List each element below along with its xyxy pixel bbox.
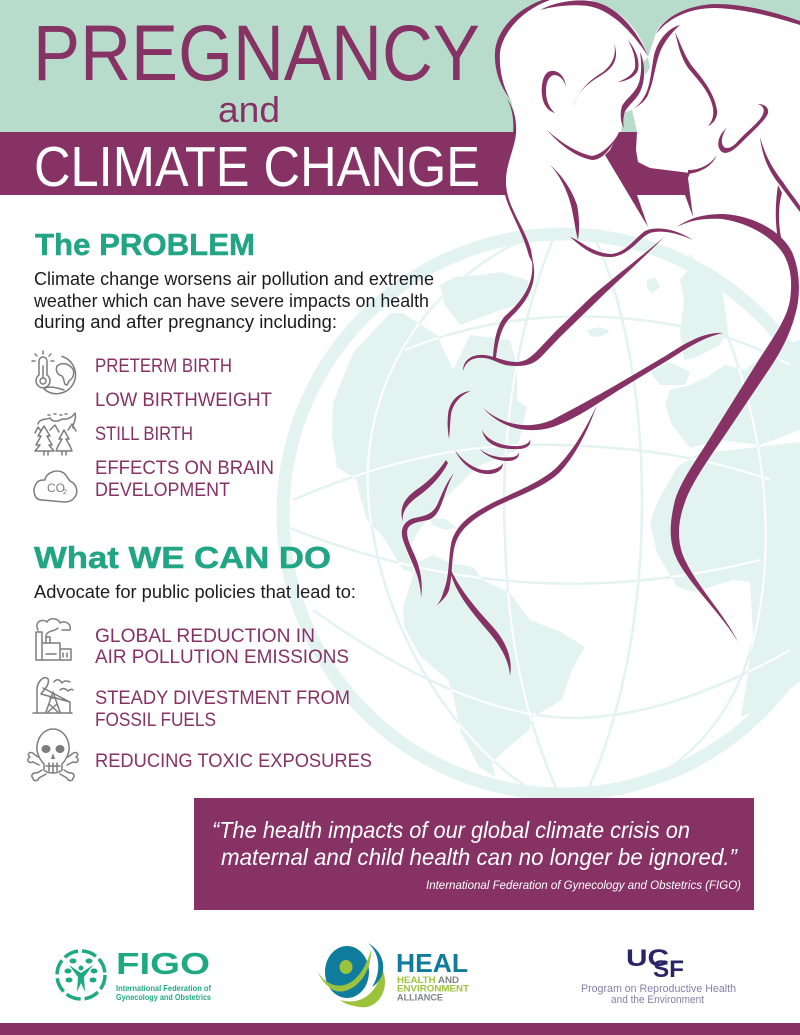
globe outline ring xyxy=(283,234,800,794)
FIGO full name xyxy=(116,983,211,1002)
action list item: STEADY DIVESTMENT FROM xyxy=(95,687,350,709)
quote box xyxy=(194,798,754,910)
mint header background xyxy=(0,0,800,132)
problem description: weather which can have severe impacts on health xyxy=(33,290,429,311)
background globe xyxy=(283,232,800,797)
continents xyxy=(332,268,800,777)
icon: forest fire xyxy=(35,413,76,455)
problem list item: EFFECTS ON BRAIN xyxy=(95,457,274,479)
icon: oil pump xyxy=(33,678,73,713)
quote callout xyxy=(194,798,754,910)
heading: The PROBLEM: The PROBLEM xyxy=(35,227,255,262)
icon: CO2 cloud: 2 xyxy=(63,489,67,496)
purple title band xyxy=(0,132,800,195)
FIGO full name: Gynecology and Obstetrics xyxy=(116,992,211,1002)
outline strokes xyxy=(401,0,800,676)
logo: FIGO xyxy=(57,946,211,1002)
problem list item: DEVELOPMENT xyxy=(95,479,230,501)
HEAL full name: ALLIANCE xyxy=(397,992,443,1004)
problem list item: PRETERM BIRTH xyxy=(95,355,232,377)
HEAL full name xyxy=(397,975,469,1004)
quote text xyxy=(212,817,738,870)
white silhouette fill xyxy=(496,0,800,196)
action list item: GLOBAL REDUCTION IN xyxy=(95,625,315,647)
UCSF wordmark: UC xyxy=(626,945,669,972)
quote text: maternal and child health can no longer be ignored.” xyxy=(221,844,738,870)
footer bar xyxy=(0,1023,800,1035)
FIGO emblem xyxy=(57,951,105,999)
UCSF program name: and the Environment xyxy=(611,994,704,1006)
globe grid lines xyxy=(290,232,790,797)
action list item xyxy=(95,625,349,668)
quote source: International Federation of Gynecology and Obstetrics (FIGO) xyxy=(426,880,741,892)
action list item xyxy=(95,687,350,731)
HEAL full name: ENVIRONMENT xyxy=(397,984,469,995)
logo: HEAL xyxy=(318,943,469,1007)
HEAL wordmark: HEAL xyxy=(396,948,468,978)
problem description: during and after pregnancy including: xyxy=(34,311,337,332)
purple gap under chins xyxy=(605,132,693,227)
problem list item xyxy=(95,457,274,501)
HEAL emblem xyxy=(318,943,385,1007)
silhouette of mother and baby xyxy=(401,0,800,676)
quote text: “The health impacts of our global climate crisis on xyxy=(212,817,690,843)
icon: thermometer and globe xyxy=(32,351,75,394)
FIGO wordmark: FIGO xyxy=(116,946,210,981)
action list item: FOSSIL FUELS xyxy=(95,709,216,731)
panel: the problem xyxy=(32,227,434,502)
panel: what we can do xyxy=(28,540,372,781)
header banner xyxy=(0,0,800,199)
logo: UCSF xyxy=(581,945,736,1006)
UCSF wordmark xyxy=(626,945,684,983)
icon: CO2 cloud xyxy=(34,471,77,502)
problem list item: LOW BIRTHWEIGHT xyxy=(95,389,272,411)
UCSF program name: Program on Reproductive Health xyxy=(581,983,736,995)
title: CLIMATE CHANGE: CLIMATE CHANGE xyxy=(34,135,480,199)
problem description xyxy=(33,268,434,332)
UCSF program name xyxy=(581,983,736,1006)
action list item: REDUCING TOXIC EXPOSURES xyxy=(95,750,372,772)
grid lines over land xyxy=(352,323,790,762)
icon: skull and crossbones xyxy=(28,729,78,781)
title: and: and xyxy=(218,89,280,130)
FIGO full name: International Federation of xyxy=(116,983,211,993)
action intro: Advocate for public policies that lead to: xyxy=(34,581,356,602)
title: PREGNANCY: PREGNANCY xyxy=(33,8,480,97)
mint gap between faces xyxy=(621,57,650,132)
UCSF wordmark: SF xyxy=(653,956,684,983)
icon: factory xyxy=(36,619,71,660)
icon: CO2 cloud: CO xyxy=(47,481,65,495)
problem list item: STILL BIRTH xyxy=(95,423,193,445)
problem description: Climate change worsens air pollution and extreme xyxy=(34,268,434,289)
action list item: AIR POLLUTION EMISSIONS xyxy=(95,646,349,668)
heading: What WE CAN DO: What WE CAN DO xyxy=(34,540,331,575)
HEAL full name: HEALTH AND xyxy=(397,975,459,986)
